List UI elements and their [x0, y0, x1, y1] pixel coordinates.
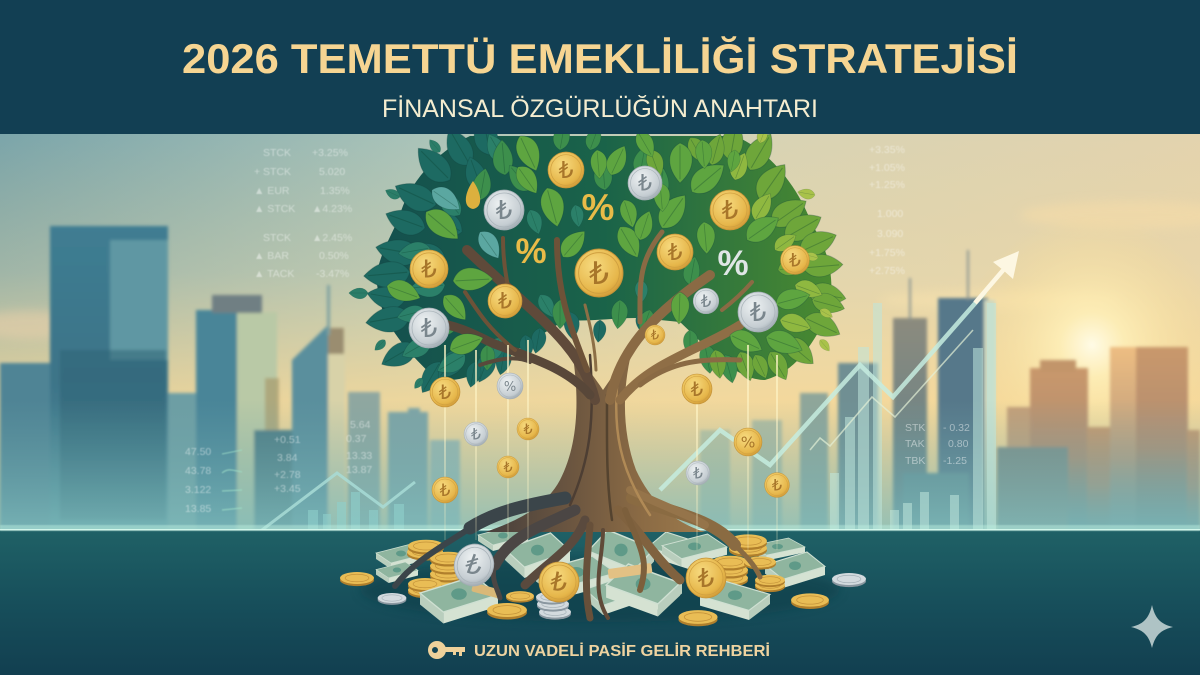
stock tickers: upper left: ▲ EUR: [254, 185, 290, 197]
trunk strands: [570, 355, 592, 505]
leaves: teal accents: [427, 182, 506, 263]
loose outer leaves: [349, 125, 835, 391]
stock tickers: upper right: 1.000: [877, 208, 903, 220]
shadow under pile: [360, 558, 840, 622]
trunk: [485, 350, 705, 532]
gold coin: [710, 190, 750, 230]
stock tickers: upper left: ▲ STCK: [254, 203, 295, 215]
large gold coin: [575, 249, 623, 297]
stock tickers: lower right: -1.25: [943, 455, 967, 467]
stock tickers: upper right: +2.75%: [869, 265, 905, 277]
falling gold coin: [517, 418, 539, 440]
falling gold coin: ₺: [503, 460, 513, 476]
line chart: left: [262, 473, 415, 530]
falling gold coin: ₺: [440, 480, 451, 500]
gold coin: [536, 559, 582, 605]
rising arrow chart: [660, 251, 1019, 490]
icon: four-point star: [1131, 605, 1173, 648]
stock tickers: lower left: +3.45: [274, 483, 301, 495]
stock tickers: lower right: 0.80: [948, 438, 969, 450]
stock tickers: lower left: +2.78: [274, 469, 301, 481]
gold coin: ₺: [498, 289, 512, 315]
stock tickers: upper left: ▲ BAR: [254, 250, 289, 262]
silver coin: ₺: [496, 196, 512, 226]
stock tickers: lower left: 43.78: [185, 465, 211, 477]
small gold coin: [645, 325, 665, 345]
cash stacks: back row: [376, 526, 825, 615]
stock tickers: upper left: 5.020: [319, 166, 345, 178]
coins in the canopy: [409, 152, 809, 348]
percent sign gold: %: [515, 232, 547, 271]
root: dark left: [470, 498, 565, 528]
bar chart: right: [830, 303, 996, 530]
stock tickers: lower left: +0.51: [274, 434, 301, 446]
money and coins pile: [340, 526, 866, 626]
stock tickers: lower left: 13.87: [346, 464, 372, 476]
stock tickers: upper left: 1.35%: [320, 185, 350, 197]
ground: [0, 530, 1200, 675]
stock tickers: lower right: - 0.32: [943, 422, 970, 434]
stock tickers: lower left: 47.50: [185, 446, 211, 458]
stock tickers: upper left: +3.25%: [312, 147, 348, 159]
tagline text: UZUN VADELİ PASİF GELİR REHBERİ: [474, 642, 770, 660]
stock tickers: lower left: 3.84: [277, 452, 298, 464]
hanging gold coin: [682, 374, 712, 404]
root: warm right: [618, 510, 680, 580]
stock tickers: upper left: + STCK: [254, 166, 291, 178]
hanging silver percent coin: [497, 373, 523, 399]
sky background: [0, 134, 1200, 530]
coin stack: right: [712, 534, 785, 592]
stock tickers: upper right: +3.35%: [869, 144, 905, 156]
hanging silver percent coin: %: [504, 380, 516, 395]
stock tickers: lower left: 5.64: [350, 419, 371, 431]
stock tickers: upper left: 0.50%: [319, 250, 349, 262]
silver coin: [738, 292, 778, 332]
silver coin: [693, 288, 719, 314]
stock tickers: upper left: STCK: [263, 147, 291, 159]
horizon glow line: [0, 525, 1200, 531]
leaves: mid green: [425, 120, 741, 385]
leaves: dark teal left side: [363, 112, 651, 398]
silver coin: ₺: [701, 292, 712, 311]
stock tickers: upper left: ▲ TACK: [254, 268, 294, 280]
stock tickers: lower left: 0.37: [346, 433, 367, 445]
silver coin: [484, 190, 524, 230]
falling gold coin: [765, 473, 789, 497]
gold coin: ₺: [559, 156, 574, 184]
falling gold coin: [497, 456, 519, 478]
silver coin: [628, 166, 662, 200]
gold coin: ₺: [698, 564, 714, 594]
stock tickers: lower right: TAK: [905, 438, 925, 450]
stock tickers: upper right: 3.090: [877, 228, 903, 240]
silver coin: [448, 539, 500, 591]
falling gold percent coin: [734, 428, 762, 456]
stock tickers: lower left: [185, 419, 372, 515]
stock tickers: lower left: 3.122: [185, 484, 211, 496]
gold coin: [657, 234, 693, 270]
stock tickers: lower right: STK: [905, 422, 925, 434]
gold coin: ₺: [421, 255, 437, 284]
mist over skyline base: [0, 400, 1200, 530]
leaves: bright right side: [643, 120, 848, 384]
hanging gold coin: ₺: [439, 381, 451, 404]
falling silver coin: [464, 422, 488, 446]
falling gold coin: [432, 477, 458, 503]
subtitle: FİNANSAL ÖZGÜRLÜĞÜN ANAHTARI: [382, 94, 818, 123]
stock tickers: upper left: STCK: [263, 232, 291, 244]
falling silver coin: ₺: [471, 425, 481, 443]
silver coin: ₺: [750, 298, 766, 328]
stock tickers: upper right: +1.25%: [869, 179, 905, 191]
silver coin: ₺: [638, 171, 652, 197]
falling gold percent coin: %: [741, 434, 755, 452]
percent sign silver: %: [717, 244, 749, 283]
stock tickers: upper right: +1.75%: [869, 247, 905, 259]
coin stack: left: [407, 540, 466, 598]
falling gold coin: ₺: [523, 422, 533, 438]
hanging gold coin: [430, 377, 460, 407]
light beams from falling coins: [444, 340, 778, 550]
falling gold coin: ₺: [772, 476, 782, 495]
stock tickers: upper right: [869, 144, 905, 277]
hanging gold coin: ₺: [691, 378, 703, 401]
falling silver coin: [686, 461, 710, 485]
tree roots and trunk: [395, 350, 760, 618]
title: 2026 TEMETTÜ EMEKLİLİĞİ STRATEJİSİ: [182, 35, 1018, 82]
bar chart: left: [308, 492, 404, 530]
silver coin: ₺: [421, 314, 437, 344]
gold teardrop leaf: [466, 181, 480, 209]
gold coin: [548, 152, 584, 188]
upright coins on the pile: [448, 539, 726, 605]
header banner: [0, 0, 1200, 134]
stock tickers: lower left: 13.33: [346, 450, 372, 462]
gold coin: ₺: [548, 567, 570, 599]
stock tickers: lower left: 13.85: [185, 503, 211, 515]
stock tickers: upper left: ▲2.45%: [312, 232, 352, 244]
stock tickers: upper left: [254, 147, 352, 280]
footer tagline: [428, 641, 770, 660]
stock tickers: upper left: -3.47%: [316, 268, 349, 280]
large gold coin: ₺: [589, 256, 609, 292]
gold coin: ₺: [668, 238, 683, 266]
gold coin: [686, 558, 726, 598]
gold coin: ₺: [722, 196, 738, 226]
leaves: bright foreground: [384, 128, 812, 359]
tree branches: [432, 232, 752, 400]
silver coin: [409, 308, 449, 348]
stock tickers: upper right: +1.05%: [869, 162, 905, 174]
gold coin: [410, 250, 448, 288]
percent sign gold: %: [582, 187, 614, 228]
skyline: right buildings: [700, 250, 1200, 533]
gold coin: ₺: [789, 250, 801, 271]
tree canopy: [349, 112, 848, 400]
gold coin: [781, 246, 809, 274]
hanging and falling coins: [430, 373, 789, 503]
stock tickers: upper left: ▲4.23%: [312, 203, 352, 215]
falling silver coin: ₺: [693, 464, 703, 482]
cash stacks: front row: [420, 563, 770, 624]
gold coin: [488, 284, 522, 318]
stock tickers: lower right: [905, 422, 970, 467]
small gold coin: ₺: [651, 328, 659, 344]
loose coins: [340, 572, 866, 626]
silver coin: ₺: [461, 548, 487, 584]
skyline: left buildings: [0, 226, 460, 533]
stock tickers: lower right: TBK: [905, 455, 925, 467]
icon: key: [428, 641, 465, 659]
sun glow: [962, 215, 1200, 475]
